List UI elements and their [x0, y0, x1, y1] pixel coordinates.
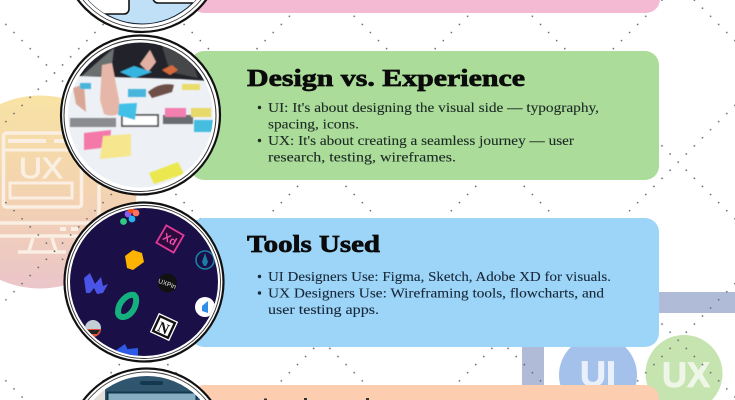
- icon: uxpin: [157, 274, 177, 292]
- UX badge: UX: [662, 356, 711, 395]
- icon: sketch: [125, 250, 144, 270]
- sticky notes: [120, 66, 152, 78]
- background blob with UX monitor icon: UX: [19, 153, 63, 185]
- icon: green loop: [118, 295, 136, 317]
- people in the background: [79, 42, 205, 82]
- heading: tools used: Tools Used: [247, 232, 381, 258]
- text: tools lists: [258, 269, 611, 317]
- decorative bars: [522, 292, 735, 390]
- icon: notion: N: [155, 319, 172, 338]
- wireframe strip: [70, 118, 116, 127]
- panel: peach bottom: [190, 385, 659, 400]
- icon: uxpin: UXPin: [157, 278, 177, 291]
- text: UI and UX definitions: research, testing, wireframes.: [268, 150, 456, 164]
- text: UI and UX definitions: [258, 100, 599, 164]
- icon: white round logo: [195, 297, 215, 317]
- icon: adobe XD: [156, 225, 184, 253]
- icon: split circle logo: [85, 320, 101, 337]
- clipped heading tops: [264, 398, 369, 400]
- icon: figma: [120, 207, 139, 225]
- icon: webflow: [84, 273, 108, 294]
- text: tools lists: user testing apps.: [268, 302, 379, 317]
- text: UI and UX definitions: UI: It's about designing the visual side — typography,: [268, 100, 599, 115]
- photo circle: phone screen: [82, 367, 212, 400]
- icon: blue stripes: [115, 344, 138, 356]
- photo circle: app mockup: [76, 0, 208, 34]
- UX badge: [646, 335, 722, 400]
- photo circle: design workshop with sticky notes: [60, 35, 225, 194]
- photo circle: design tool logos: [64, 202, 224, 362]
- icon: notion: [151, 314, 177, 340]
- heading: design vs experience: Design vs. Experience: [247, 66, 525, 92]
- panel: pink top: [190, 0, 660, 13]
- UI badge: UI: [580, 355, 616, 394]
- text: tools lists: UX Designers Use: Wireframing tools, flowcharts, and: [268, 286, 604, 300]
- icon: adobe XD: Xd: [160, 231, 179, 249]
- text: UI and UX definitions: UX: It's about creating a seamless journey — user: [268, 133, 575, 148]
- panel: design vs experience: [190, 51, 659, 180]
- panel: tools used: [190, 218, 659, 347]
- text: tools lists: UI Designers Use: Figma, Sketch, Adobe XD for visuals.: [268, 269, 611, 284]
- icon: rocket badge: [196, 251, 214, 269]
- UI badge: [559, 336, 637, 400]
- background blob with UX monitor icon: [0, 96, 136, 288]
- text: UI and UX definitions: spacing, icons.: [268, 116, 359, 132]
